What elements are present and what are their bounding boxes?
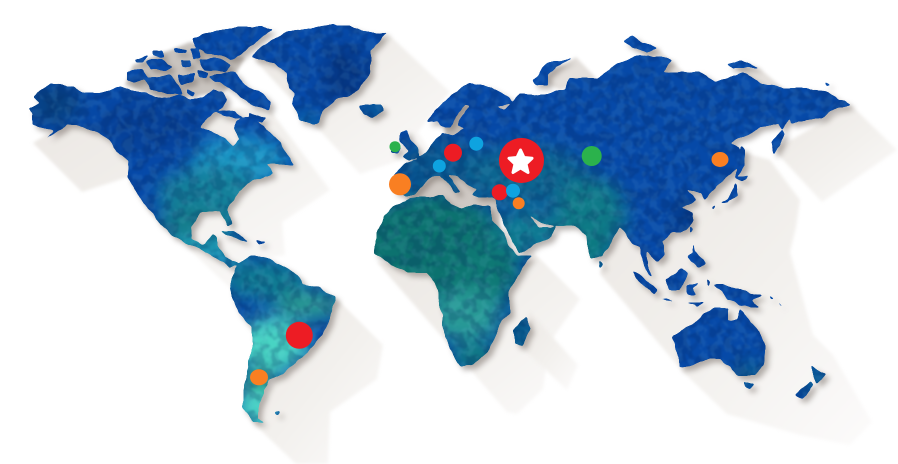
island: Novaya Zemlya	[532, 57, 576, 85]
island: Sakhalin	[735, 145, 749, 181]
island: Japan	[712, 183, 739, 210]
marker: blue central Europe	[433, 160, 446, 172]
island: Severnaya Zemlya	[624, 36, 657, 53]
marker: red Poland	[444, 144, 462, 162]
continent: Africa	[375, 195, 533, 367]
island: Great Britain and Ireland	[391, 130, 420, 160]
continent: Canadian Arctic islands	[127, 27, 273, 122]
marker: red Brazil	[286, 322, 313, 349]
island: Tasmania	[744, 381, 755, 389]
shadow: North America, Alaska side	[33, 100, 330, 290]
island: Sri Lanka and Taiwan	[599, 226, 693, 269]
continent: Greenland	[252, 23, 387, 125]
continent: North America	[30, 83, 294, 268]
shadow: Severnaya Zemlya	[640, 48, 690, 80]
marker: blue Baltic	[469, 137, 483, 151]
shadow: Novaya Zemlya	[540, 57, 596, 90]
island: New Zealand	[795, 365, 825, 399]
islands: Southeast Asia	[632, 242, 709, 307]
channels: gray Baltic water	[445, 105, 472, 140]
shadow: Africa	[377, 252, 580, 414]
island: Falklands	[275, 412, 281, 416]
marker: green Ireland	[390, 141, 400, 152]
marker: orange Far East	[712, 152, 728, 167]
island: Iceland	[360, 105, 383, 117]
land masses with watercolor texture	[30, 23, 851, 423]
shadow: New Siberian Islands	[735, 65, 785, 90]
marker: orange Argentina	[250, 369, 268, 385]
marker: green Central Asia	[582, 146, 602, 166]
marker: orange Iberia	[389, 173, 411, 195]
marker: red circle with white star	[499, 138, 544, 183]
island: Madagascar	[513, 317, 531, 345]
marker: red Turkey	[492, 184, 508, 200]
channels: gray Mediterranean water	[405, 170, 515, 258]
shadow: east Asia and Japan	[600, 150, 872, 445]
marker: blue Caucasus	[506, 184, 520, 198]
map markers	[250, 137, 728, 385]
marker: orange Middle East	[513, 197, 525, 209]
island: New Siberian Islands	[727, 61, 832, 86]
continent: Eurasia	[392, 55, 851, 277]
shadow: Madagascar	[517, 312, 578, 390]
channels: gray water in the Arctic Archipelago	[125, 42, 245, 100]
island: New Guinea	[713, 285, 787, 309]
continent: Australia	[673, 307, 766, 375]
shadow: northern Asia	[774, 105, 897, 202]
shadow: South America	[250, 297, 383, 464]
island: Caribbean	[219, 232, 266, 244]
continent: South America	[230, 255, 335, 423]
shadow: Greenland	[252, 33, 450, 174]
